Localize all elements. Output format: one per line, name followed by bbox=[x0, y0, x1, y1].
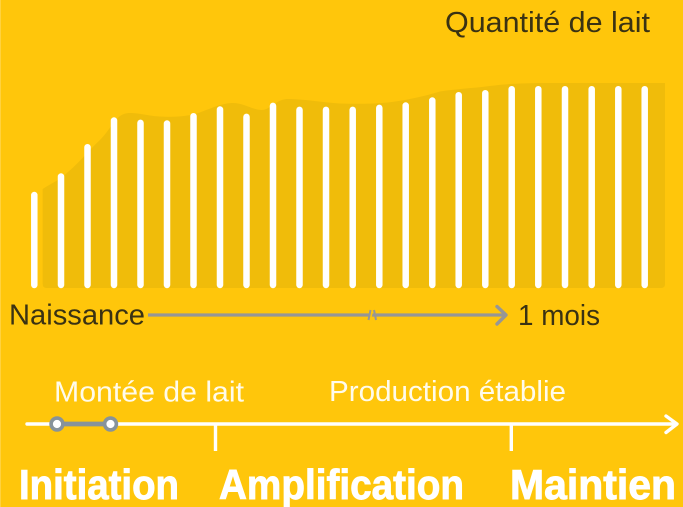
label: milk coming in: Montée de lait bbox=[54, 377, 244, 409]
label: established production: Production établie bbox=[329, 376, 566, 408]
axis: lactation stages bbox=[27, 416, 677, 451]
stage: maintenance: Maintien bbox=[510, 461, 676, 507]
milk coming in segment bbox=[51, 418, 116, 430]
label: one month: 1 mois bbox=[518, 300, 600, 332]
chart: milk quantity over first month bbox=[34, 83, 665, 288]
arrow: first month timeline bbox=[148, 306, 506, 324]
bars: daily milk quantity bbox=[34, 89, 645, 285]
chart background area bbox=[43, 83, 665, 288]
title: milk quantity: Quantité de lait bbox=[445, 7, 650, 39]
label: birth: Naissance bbox=[9, 300, 145, 332]
stage: amplification: Amplification bbox=[219, 461, 464, 507]
stage: initiation: Initiation bbox=[19, 461, 179, 507]
